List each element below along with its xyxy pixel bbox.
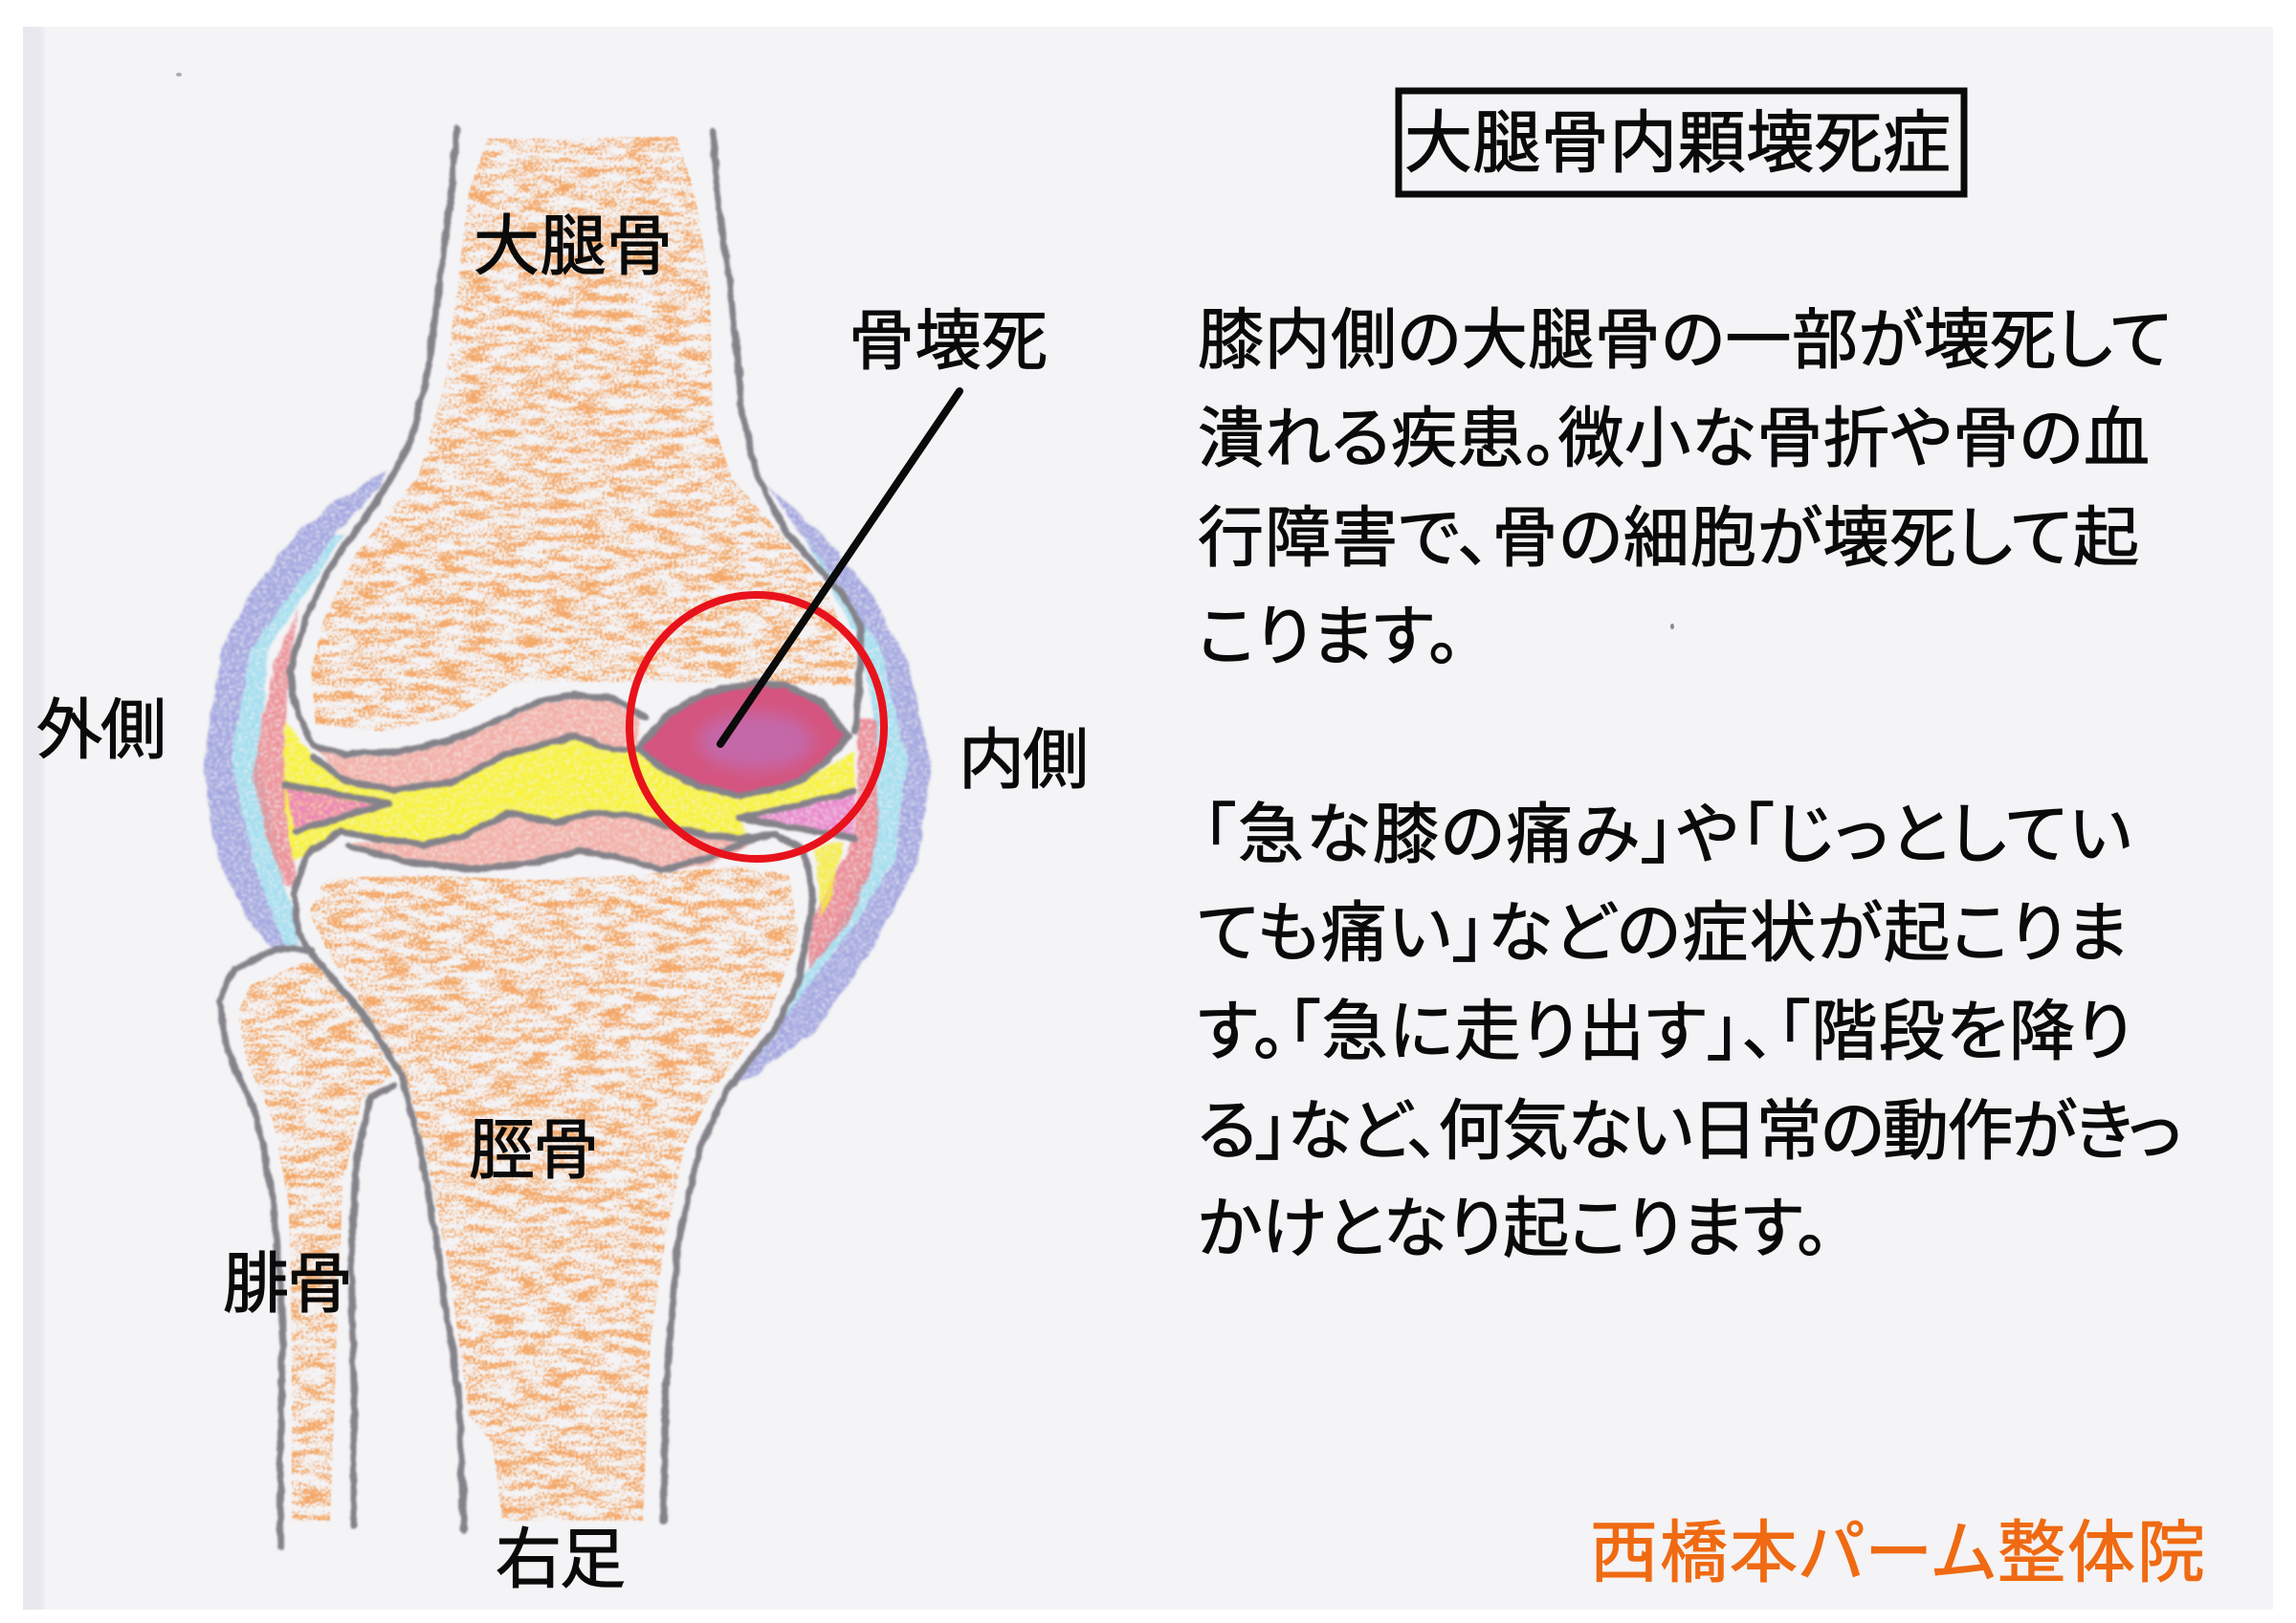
label: right leg: 右足 [496, 1523, 626, 1596]
necrosis outline [638, 683, 849, 796]
label: osteonecrosis: 骨壊死 [849, 304, 1048, 378]
clinic name: 西橋本パーム整体院 [1590, 1516, 2205, 1591]
fibula outline left [219, 949, 311, 1547]
outer capsule: medial side [737, 486, 931, 1081]
label: femur: 大腿骨 [474, 209, 673, 283]
label: medial: 内側 [959, 723, 1089, 797]
description paragraph two: かけとなり起こります。 [1198, 1192, 1829, 1265]
label: tibia: 脛骨 [469, 1113, 599, 1187]
tibia plateau and sides [294, 813, 813, 1522]
femoral cartilage [314, 697, 639, 790]
description paragraph one: 膝内側の大腿骨の一部が壊死して [1198, 303, 2172, 377]
description paragraph two: る」など、何気ない日常の動作がきっ [1198, 1094, 2181, 1168]
label: lateral: 外側 [36, 693, 166, 767]
lateral meniscus [285, 786, 387, 831]
tibia bone texture [309, 866, 799, 1521]
tibial cartilage lower edge [348, 835, 775, 870]
red collateral tissue: medial [809, 720, 877, 971]
medial meniscus [741, 792, 854, 839]
joint fluid (yellow) [283, 722, 854, 861]
tibial cartilage [348, 813, 749, 869]
leader line [720, 391, 960, 744]
description paragraph two: 「急な膝の痛み」や「じっとしてい [1203, 798, 2131, 871]
description paragraph one: 潰れる疾患。微小な骨折や骨の血 [1198, 402, 2150, 475]
title box [1399, 91, 1964, 194]
red collateral tissue: lateral [254, 606, 298, 887]
medial meniscus outline [740, 792, 854, 839]
red circle marker [629, 595, 884, 859]
pencil outlines [219, 129, 861, 1547]
tibia left side [311, 954, 464, 1529]
title: 大腿骨内顆壊死症 [1404, 106, 1951, 182]
femur outline left [290, 129, 645, 754]
description paragraph one: こります。 [1198, 600, 1461, 673]
description paragraph two: す。「急に走り出す」、「階段を降り [1198, 995, 2131, 1068]
label: fibula: 腓骨 [223, 1247, 353, 1321]
fibula bone texture [237, 959, 392, 1521]
lateral meniscus outline [285, 784, 387, 831]
joint fluid flap (medial) [815, 842, 844, 918]
osteonecrosis lesion [638, 683, 849, 796]
description paragraph one: 行障害で、骨の細胞が壊死して起 [1198, 501, 2139, 575]
description paragraph two [1198, 798, 2181, 1265]
femur bone texture [311, 137, 856, 732]
knee diagram [204, 129, 960, 1547]
description paragraph one [1198, 303, 2172, 673]
description paragraph two: ても痛い」などの症状が起こりま [1198, 896, 2128, 970]
femur outline right [714, 132, 861, 732]
outer capsule: lateral side [204, 470, 387, 950]
fibula outline right [351, 1086, 394, 1526]
femoral cartilage lower edge [314, 735, 638, 790]
